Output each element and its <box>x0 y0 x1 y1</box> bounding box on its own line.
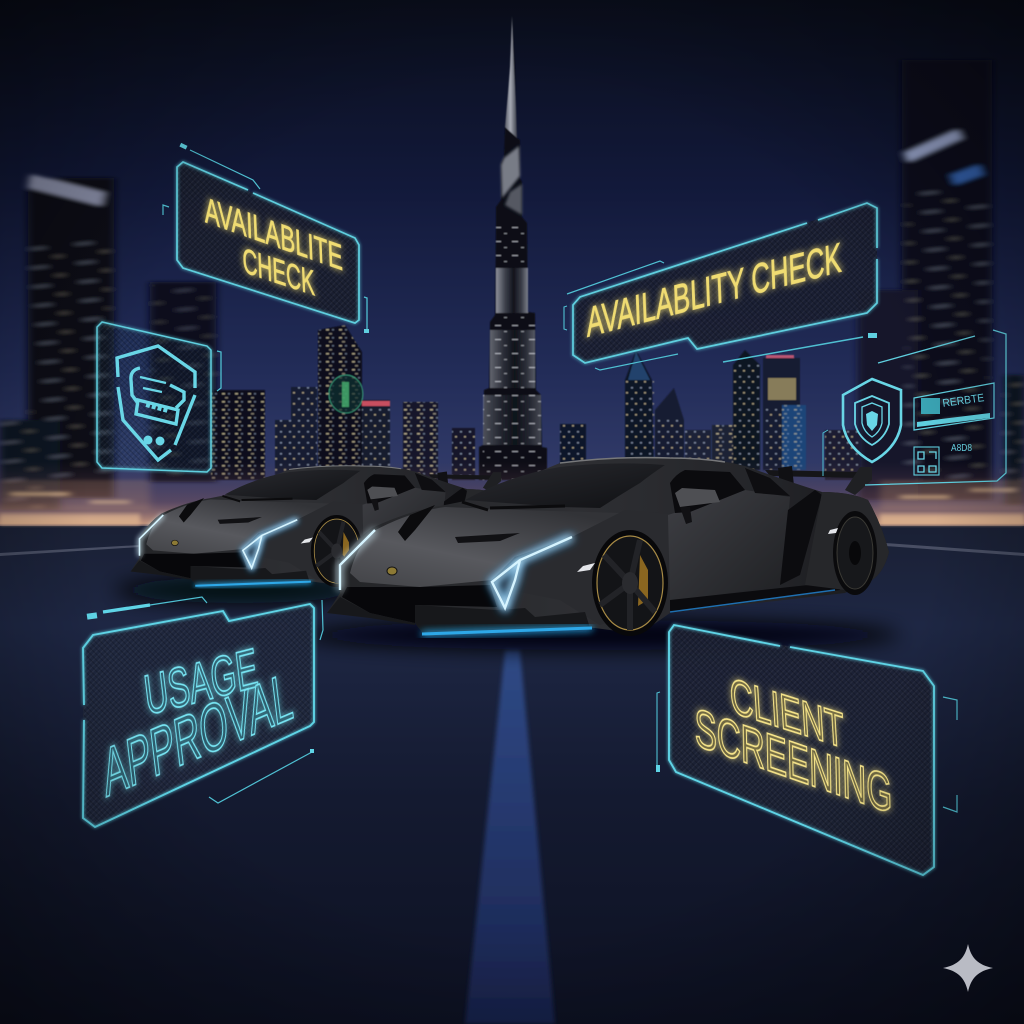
data card <box>914 383 994 430</box>
heading: availablite: AVAILABLITE <box>204 189 344 279</box>
tower: central skyscraper <box>479 16 547 480</box>
distant city skyline <box>211 325 860 480</box>
road surface <box>0 526 1024 1024</box>
heading: screening: SCREENING <box>694 697 893 826</box>
heading: client: CLIENT <box>728 667 846 759</box>
panel: availablite check <box>163 143 369 333</box>
heading: check: CHECK <box>242 241 316 304</box>
panel: usage approval <box>83 597 323 827</box>
horizon city glow <box>0 462 1024 528</box>
front supercar <box>327 458 889 636</box>
warm street lights <box>0 480 1024 510</box>
blurred left tower <box>0 174 216 510</box>
panel: availability check <box>564 203 877 370</box>
panel: shield data <box>823 330 1006 485</box>
heading: availablity check: AVAILABLITY CHECK <box>585 233 842 346</box>
data card: RERBTE <box>942 392 985 410</box>
heading: approval: APPROVAL <box>99 658 296 812</box>
heading: usage: USAGE <box>141 636 261 727</box>
road centre stripe <box>465 650 555 1024</box>
road edge lights <box>0 514 1024 556</box>
panel: shield service <box>97 322 221 472</box>
icon: security shield <box>843 379 901 462</box>
rear supercar <box>131 466 513 587</box>
data icons: A8D8 <box>951 443 972 454</box>
background sky <box>0 0 1024 530</box>
car shadows <box>115 577 900 650</box>
blurred right tower <box>858 60 1024 505</box>
data icons <box>914 443 972 475</box>
icon: shield with car tool <box>117 346 195 460</box>
panel: client screening <box>656 625 957 875</box>
icon: sparkle watermark <box>943 944 993 992</box>
